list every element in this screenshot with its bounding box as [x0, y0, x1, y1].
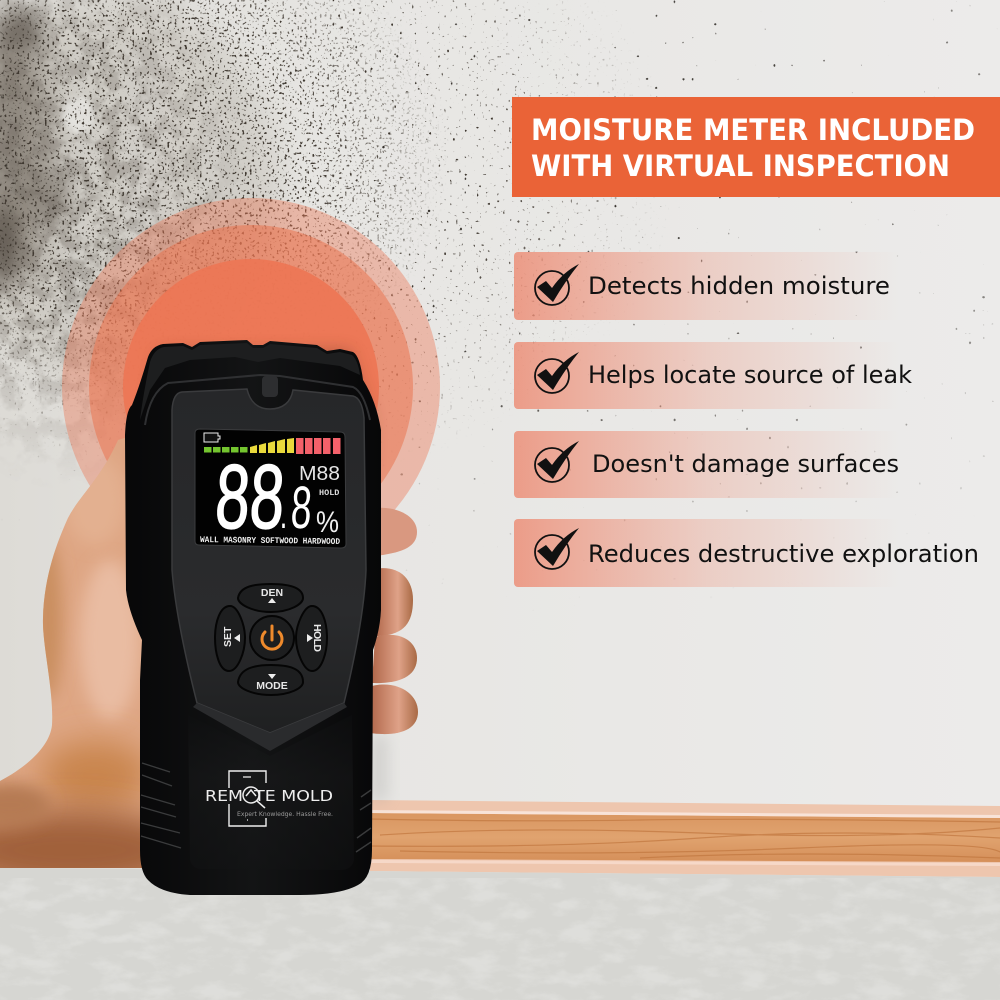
- finger two: [375, 568, 413, 636]
- control buttons: [215, 584, 327, 695]
- mold speckles: [0, 0, 998, 584]
- hold label: HOLD: [319, 488, 339, 498]
- benefit: no surface damage: [514, 431, 899, 498]
- HOLD button: HOLD: [311, 624, 323, 652]
- phone speaker and button: [243, 777, 251, 820]
- faceplate: [172, 389, 366, 733]
- palm and wrist: [0, 438, 142, 868]
- finger four: [370, 684, 418, 734]
- finger three: [372, 635, 417, 683]
- wordmark: REM TE MOLD: [205, 787, 333, 805]
- concentric signal circles: [62, 198, 440, 576]
- check icon: [535, 441, 579, 482]
- concrete floor: [0, 868, 1000, 1000]
- benefit text: Detects hidden moisture: [588, 272, 890, 300]
- benefit: detects hidden moisture: [514, 252, 899, 320]
- large reading: 88: [213, 445, 287, 548]
- bar scale: [204, 438, 340, 454]
- material labels: WALL MASONRY SOFTWOOD HARDWOOD: [200, 535, 340, 547]
- check icon: [535, 264, 579, 305]
- benefit: reduces destructive exploration: [514, 519, 979, 587]
- soft wall shadow of fingers: [372, 735, 386, 801]
- meter body: [125, 340, 381, 895]
- top notch: [262, 376, 278, 397]
- check icon: [535, 352, 579, 393]
- faceplate lower bevel: [193, 703, 347, 751]
- finger one: [375, 508, 417, 556]
- percent sign: %: [316, 506, 339, 539]
- Remote Mold logo: [205, 771, 333, 826]
- side grip ridges: [141, 763, 371, 852]
- mode readout: M88: [299, 463, 340, 485]
- moisture meter device: [125, 340, 381, 895]
- check icon: [535, 528, 579, 569]
- headline line one: MOISTURE METER INCLUDED: [531, 113, 975, 147]
- battery icon: [204, 433, 220, 442]
- hand holding meter: [0, 420, 418, 890]
- benefit text: Helps locate source of leak: [588, 361, 912, 389]
- large reading: 8: [289, 474, 314, 541]
- upper bumper band: [140, 343, 360, 420]
- LCD screen: [195, 429, 346, 548]
- benefit: locate source of leak: [514, 342, 912, 409]
- SET button: SET: [222, 626, 234, 647]
- mold stain on wall: [0, 0, 286, 455]
- tagline: Expert Knowledge. Hassle Free.: [237, 812, 333, 818]
- benefit text: Doesn't damage surfaces: [592, 450, 899, 478]
- headline line two: WITH VIRTUAL INSPECTION: [531, 149, 950, 183]
- benefit text: Reduces destructive exploration: [588, 540, 979, 568]
- power button: [250, 616, 294, 660]
- MODE button: MODE: [256, 680, 288, 692]
- headline banner: [512, 97, 1000, 197]
- baseboard: [370, 800, 1000, 877]
- magnifier icon: [243, 787, 265, 808]
- upper plate: [145, 375, 370, 425]
- soft shadow above device: [135, 350, 372, 470]
- lower panel: [188, 715, 354, 870]
- large reading: .: [281, 503, 286, 535]
- DEN button: DEN: [261, 587, 283, 599]
- phone outline: [229, 771, 266, 826]
